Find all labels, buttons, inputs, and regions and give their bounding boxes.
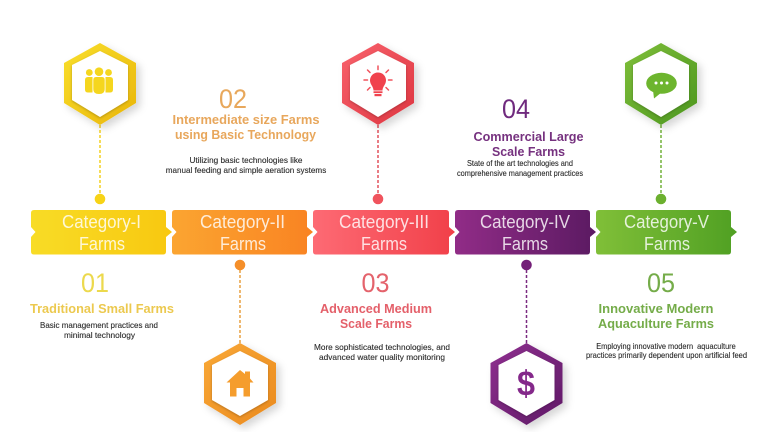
banner: Category-I Farms: Category-I [62, 212, 141, 232]
marker: yellow hexagon with people icon and connector [64, 43, 136, 204]
banner: Category-IV Farms [455, 210, 596, 254]
banner: Category-V Farms: Category-V [624, 212, 709, 232]
text block: 03 Advanced Medium Scale Farms [314, 268, 450, 362]
marker: orange hexagon with house icon and connector [204, 260, 276, 425]
text block: 02 Intermediate size Farms: Intermediate size Farms [172, 112, 320, 127]
banner: Category-III Farms: Category-III [339, 212, 429, 232]
icon: house [226, 370, 254, 396]
text block: 03 Advanced Medium Scale Farms: advanced water quality monitoring [319, 353, 445, 362]
marker: red hexagon with light bulb icon and connector [342, 43, 414, 204]
text block: 05 Innovative Modern Aquaculture Farms: Innovative Modern [598, 301, 714, 316]
text block: 04 Commercial Large Scale Farms [457, 94, 584, 178]
text block: 05 Innovative Modern Aquaculture Farms: Employing innovative modern aquaculture [596, 342, 736, 351]
text block: 02 Intermediate size Farms [166, 84, 326, 175]
banner: Category-I Farms [31, 210, 172, 254]
text block: 05 Innovative Modern Aquaculture Farms: 05 [647, 268, 675, 298]
text block: 02 Intermediate size Farms: using Basic Technology [175, 127, 317, 142]
banner: Category-II Farms: Farms [220, 234, 266, 254]
banner: Category-V Farms: Farms [644, 234, 690, 254]
text block: 02 Intermediate size Farms: Utilizing basic technologies like [190, 156, 303, 165]
banner: Category-I Farms: Farms [79, 234, 125, 254]
text block: 05 Innovative Modern Aquaculture Farms: Aquaculture Farms [598, 316, 714, 331]
text block: 03 Advanced Medium Scale Farms: Advanced Medium [320, 301, 432, 316]
text block: 04 Commercial Large Scale Farms: comprehensive management practices [457, 169, 583, 178]
icon: light bulb [364, 66, 392, 96]
text block: 04 Commercial Large Scale Farms: State of the art technologies and [467, 159, 573, 168]
text block: 01 Traditional Small Farms: Basic management practices and [40, 321, 158, 330]
text block: 03 Advanced Medium Scale Farms: More sophisticated technologies, and [314, 343, 450, 352]
icon: chat bubble [646, 73, 677, 98]
category banner row [31, 210, 737, 254]
text block: 05 Innovative Modern Aquaculture Farms: practices primarily dependent upon artificial feed [586, 351, 747, 360]
text block: 01 Traditional Small Farms: 01 [81, 268, 109, 298]
text block: 03 Advanced Medium Scale Farms: Scale Farms [340, 316, 412, 331]
text block: 05 Innovative Modern Aquaculture Farms [586, 268, 747, 360]
text block: 04 Commercial Large Scale Farms: Commercial Large [474, 129, 584, 144]
banner: Category-III Farms [313, 210, 455, 254]
marker: purple hexagon with dollar icon and connector [490, 260, 562, 425]
banner: Category-V Farms [596, 210, 737, 254]
marker: green hexagon with chat icon and connector [625, 43, 697, 204]
banner: Category-II Farms: Category-II [200, 212, 285, 232]
text block: 01 Traditional Small Farms [30, 268, 174, 340]
text block: 01 Traditional Small Farms: Traditional Small Farms [30, 301, 174, 316]
text block: 04 Commercial Large Scale Farms: 04 [502, 94, 530, 124]
text block: 02 Intermediate size Farms: manual feeding and simple aeration systems [166, 166, 326, 175]
text block: 04 Commercial Large Scale Farms: Scale Farms [492, 144, 565, 159]
text block: 01 Traditional Small Farms: minimal technology [64, 331, 135, 340]
text block: 02 Intermediate size Farms: 02 [219, 84, 247, 114]
banner: Category-II Farms [172, 210, 313, 254]
text block: 03 Advanced Medium Scale Farms: 03 [362, 268, 390, 298]
icon: dollar sign: $ [517, 364, 535, 404]
banner: Category-IV Farms: Farms [502, 234, 548, 254]
banner: Category-IV Farms: Category-IV [480, 212, 570, 232]
icon: people [85, 67, 113, 94]
banner: Category-III Farms: Farms [361, 234, 407, 254]
